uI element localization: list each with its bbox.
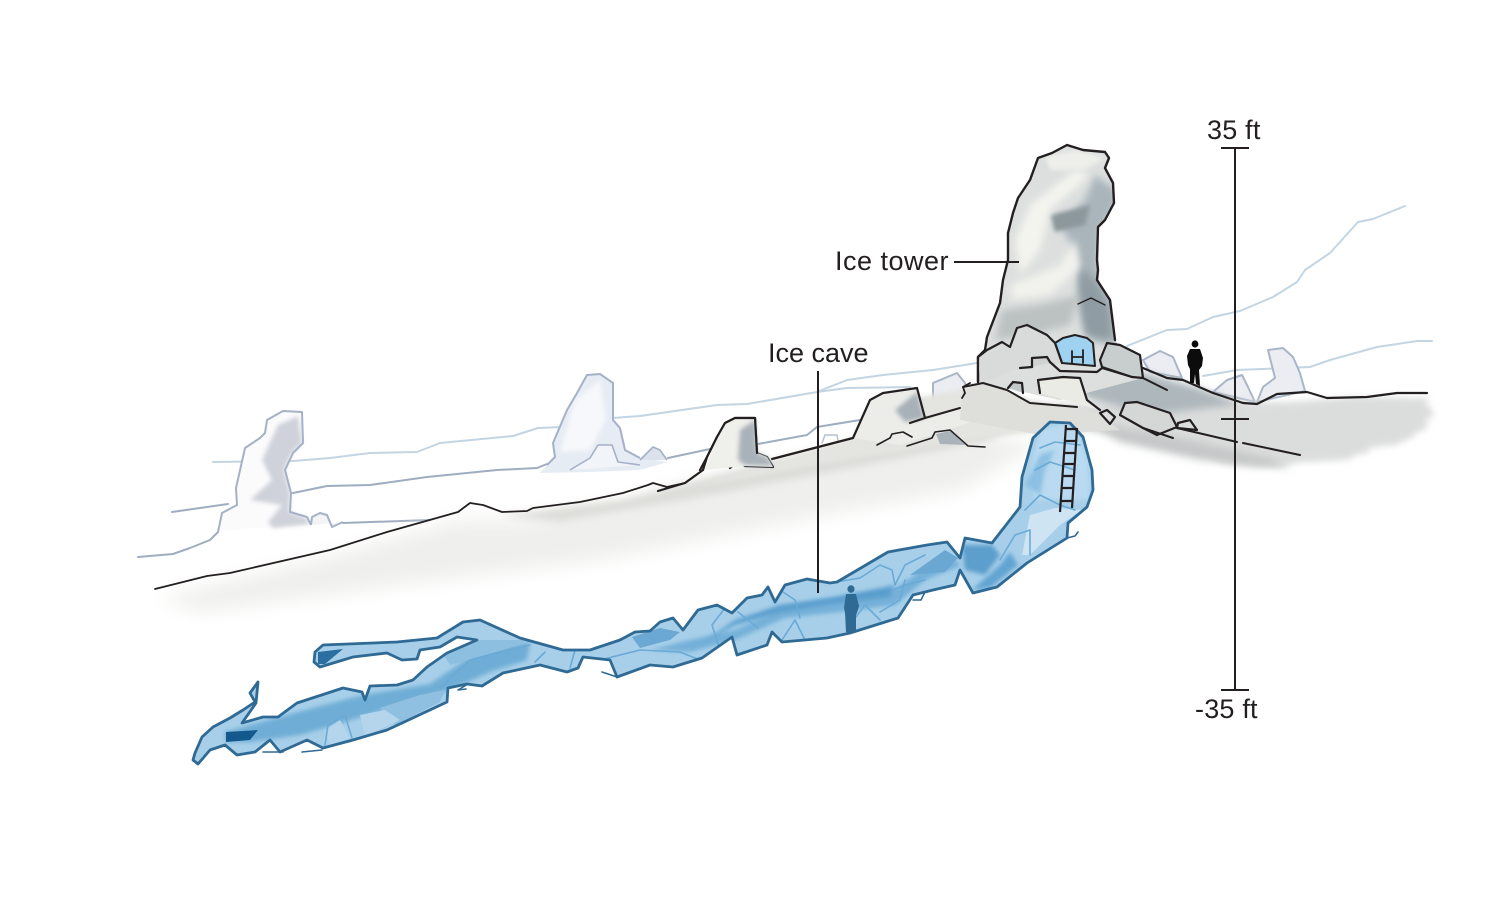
distant ice mounds behind tower	[933, 348, 1305, 407]
label: ice tower with leader: Ice tower	[835, 246, 949, 276]
ice cave	[193, 422, 1093, 764]
person in cave	[844, 585, 859, 633]
ladder in cave shaft	[1060, 425, 1077, 512]
tower entrance with ladder	[1055, 335, 1095, 366]
label: -35 ft: -35 ft	[1195, 694, 1258, 724]
label: 35 ft: 35 ft	[1207, 115, 1261, 145]
person standing near tower	[1187, 340, 1203, 386]
background: distant ridge lines	[138, 206, 1432, 557]
ground outline	[155, 368, 1427, 589]
height scale	[1221, 148, 1249, 690]
label: ice cave with leader: Ice cave	[768, 338, 869, 368]
rock: mound at foot of left slope	[700, 383, 1030, 470]
cave cracks	[325, 442, 1080, 745]
tower base snow mound	[960, 383, 1120, 435]
distant ice tower left	[218, 411, 343, 532]
front boulders	[978, 325, 1197, 435]
distant ice tower centre	[540, 374, 668, 473]
cave water-coloured bands	[225, 425, 1090, 745]
tower shading	[995, 150, 1118, 345]
infographic: ice tower and ice cave cross-section	[137, 120, 1435, 766]
snow ground with shading	[160, 372, 1432, 612]
ice tower	[960, 145, 1197, 438]
